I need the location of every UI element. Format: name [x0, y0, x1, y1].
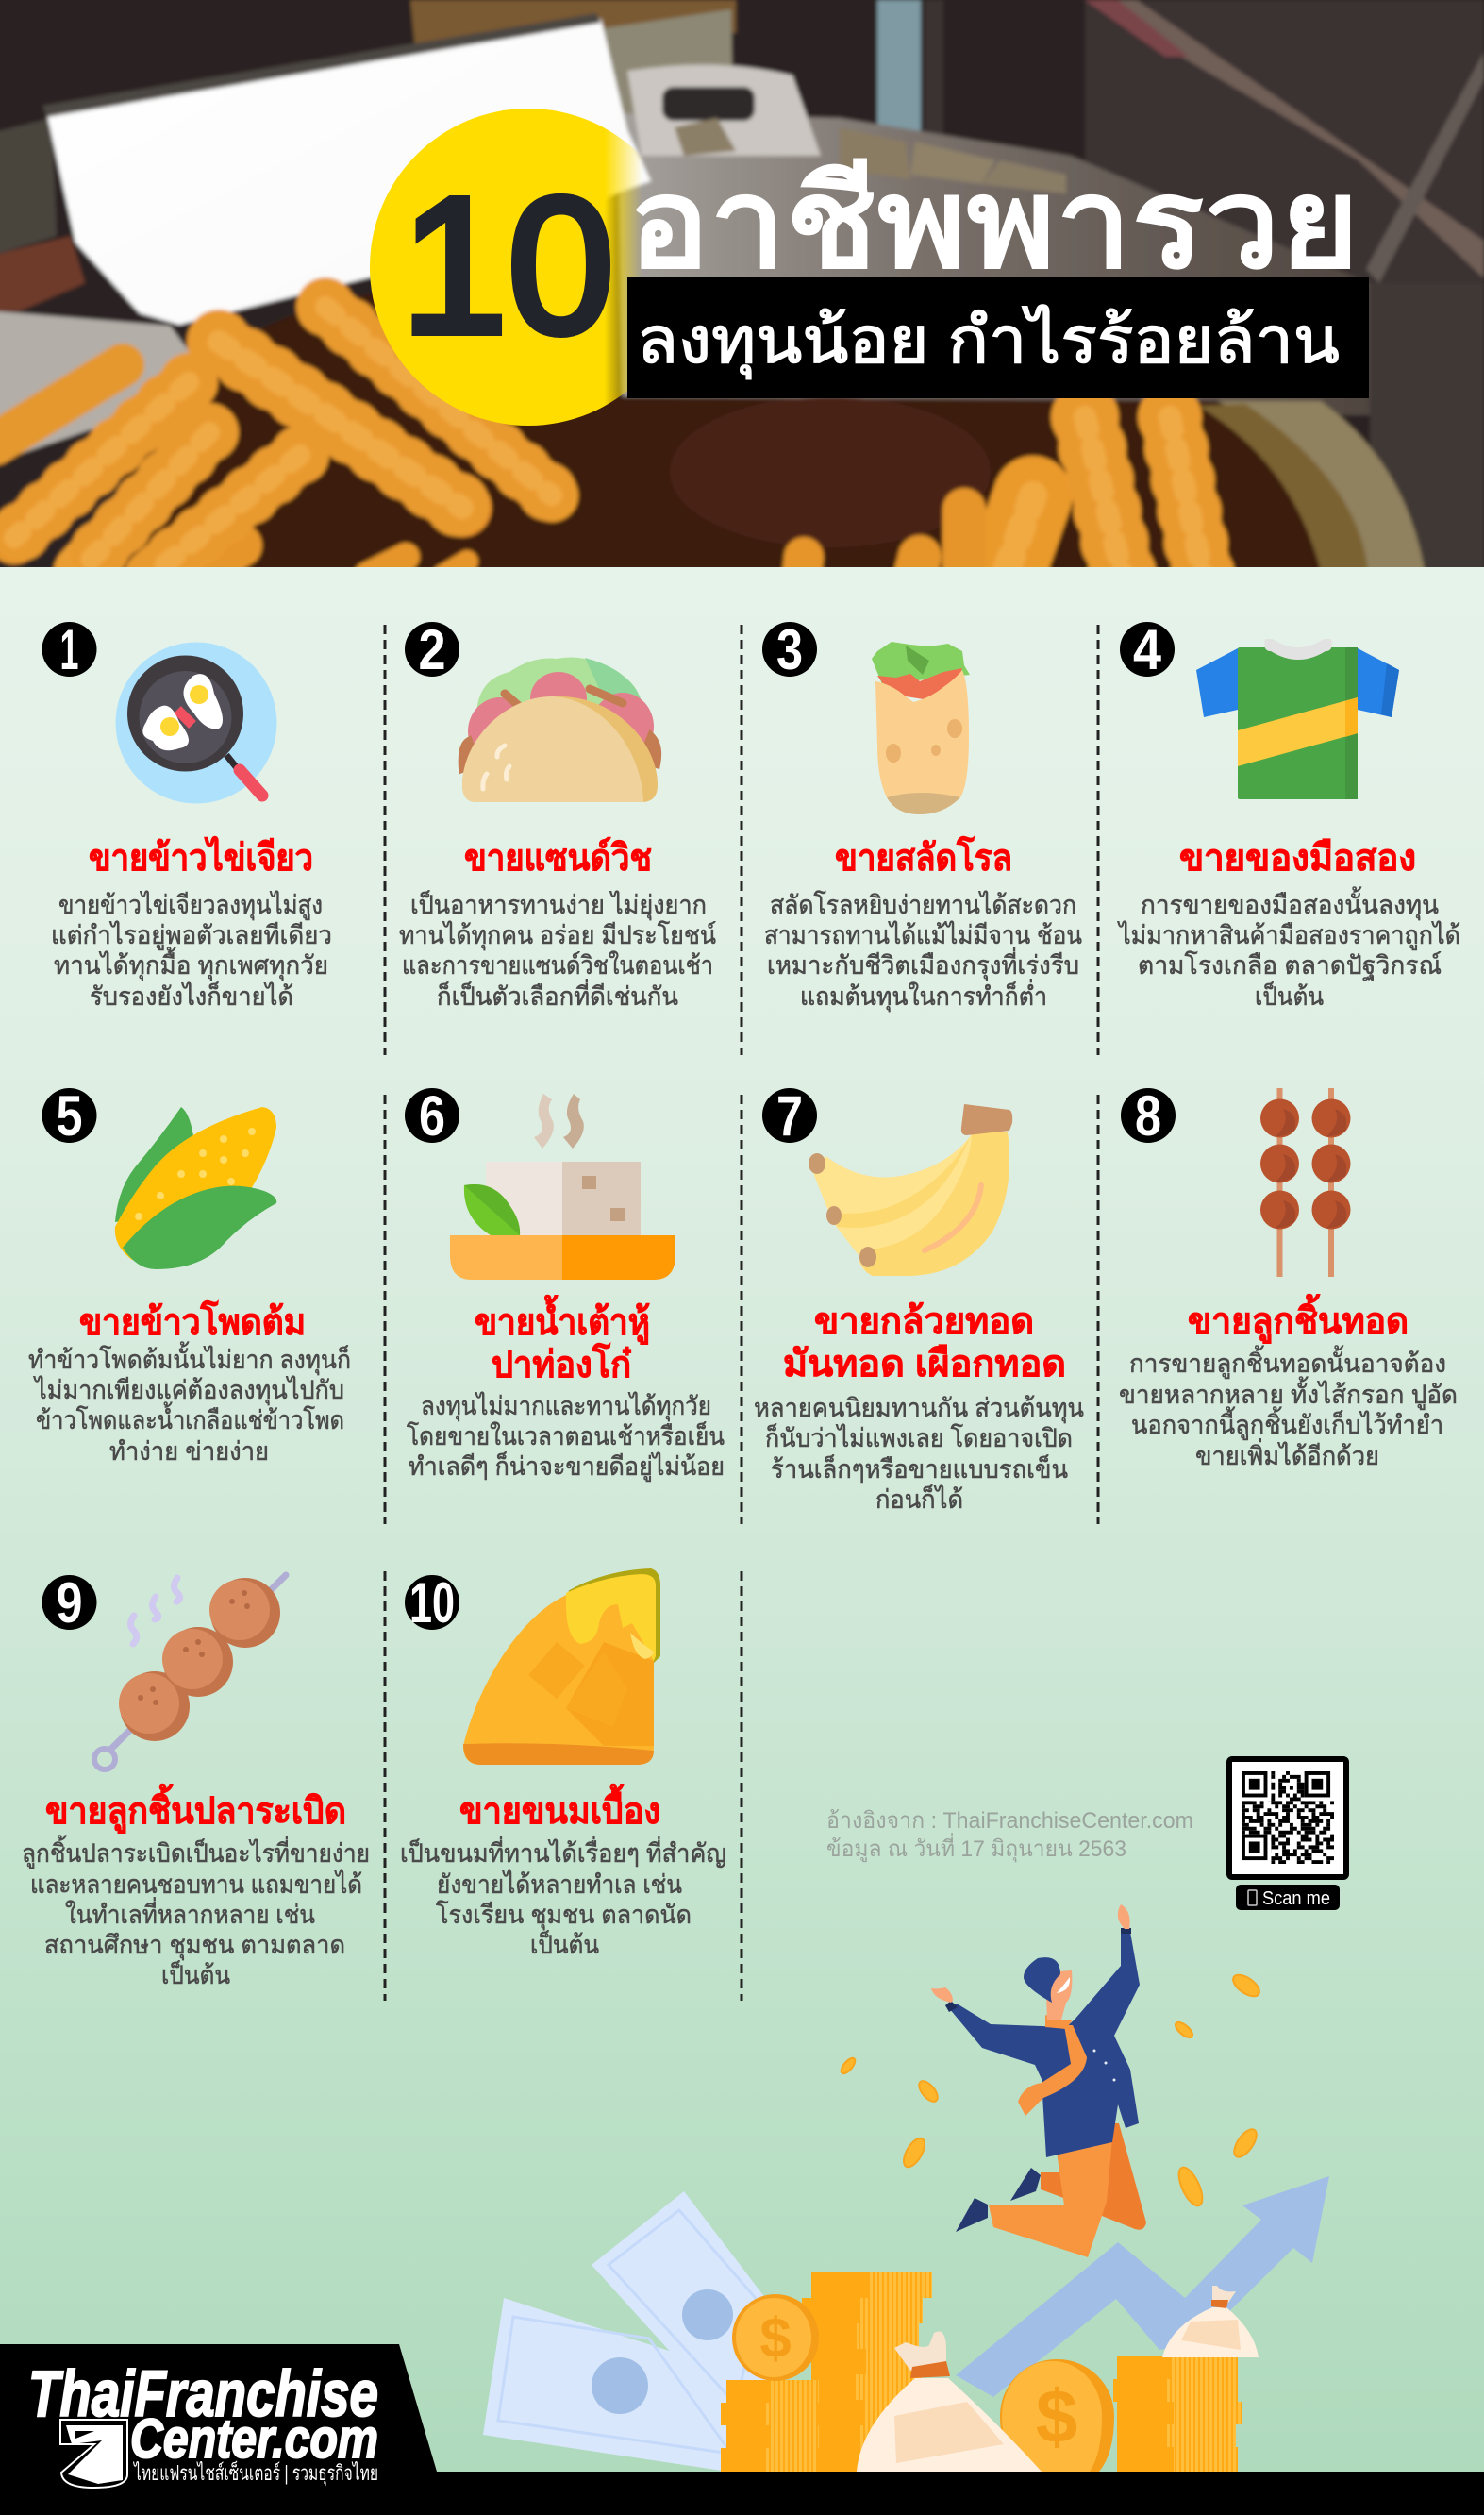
- description: ทานได้ทุกมื้อ ทุกเพศทุกวัย: [54, 947, 328, 981]
- card 4: second-hand goods: [1117, 618, 1460, 1011]
- description: การขายของมือสองนั้นลงทุน: [1141, 886, 1439, 921]
- number badge 6: [405, 1084, 459, 1148]
- logo text: ThaiFranchise: [28, 2357, 378, 2430]
- coins: $: [1036, 2374, 1077, 2458]
- description: ทำง่าย ข่ายง่าย: [109, 1437, 269, 1466]
- card 3: salad roll: [762, 618, 1082, 1013]
- description: ร้านเล็กๆหรือขายแบบรถเข็น: [771, 1452, 1068, 1484]
- description: [399, 888, 716, 1011]
- description: เป็นอาหารทานง่าย ไม่ยุ่งยาก: [410, 888, 707, 921]
- number badge 9: [42, 1571, 96, 1635]
- description: เป็นต้น: [161, 1958, 230, 1989]
- title block: [401, 154, 1369, 398]
- heading: ขายแซนด์วิช: [464, 836, 652, 879]
- description: ขายข้าวไข่เจียวลงทุนไม่สูง: [58, 891, 323, 921]
- scan me tag: Scan me: [1262, 1888, 1330, 1909]
- icon: taco sandwich: [462, 657, 658, 802]
- logo panel: ไทยแฟรนไชส์เซ็นเตอร์ | รวมธุรกิจไทย: [133, 2459, 378, 2486]
- description: ข้าวโพดและน้ำเกลือแช่ข้าวโพด: [36, 1401, 344, 1434]
- heading: ขายข้าวไข่เจียว: [89, 836, 313, 879]
- description: [754, 1394, 1084, 1514]
- bottom bar: [0, 2472, 1484, 2515]
- illustration: money stacks, arrow and bags: [483, 2176, 1329, 2472]
- description: เหมาะกับชีวิตเมืองกรุงที่เร่งรีบ: [767, 947, 1079, 981]
- number badge 2: [405, 618, 459, 681]
- description: ทานได้ทุกคน อร่อย มีประโยชน์: [399, 920, 716, 951]
- description: ในทำเลที่หลากหลาย เช่น: [65, 1897, 315, 1929]
- number badge 2: 2: [419, 618, 445, 681]
- icon: salad wrap: [872, 642, 970, 814]
- description: ก็เป็นตัวเลือกที่ดีเช่นกัน: [437, 979, 678, 1011]
- heading: ขายกล้วยทอด: [814, 1301, 1034, 1342]
- number badge 4: 4: [1133, 618, 1162, 681]
- card 10: Thai crepe: [400, 1568, 726, 1959]
- description: ทำเลดีๆ ก็น่าจะขายดีอยู่ไม่น้อย: [409, 1450, 725, 1482]
- coin stacks: [721, 2272, 1242, 2472]
- icon: tofu in bowl: [450, 1094, 675, 1280]
- description: และการขายแซนด์วิชในตอนเช้า: [402, 950, 713, 980]
- description: โดยขายในเวลาตอนเช้าหรือเย็น: [407, 1419, 725, 1450]
- card 2: sandwich: [399, 618, 716, 1011]
- description: สถานศึกษา ชุมชน ตามตลาด: [44, 1931, 345, 1961]
- donuts lumps: [14, 307, 1203, 576]
- falling coins: [839, 1970, 1263, 2209]
- number badge 4: [1120, 618, 1175, 681]
- card 8: fried meatballs: [1119, 1084, 1458, 1470]
- donuts highlight: [14, 307, 1203, 576]
- description: ก่อนก็ได้: [875, 1483, 963, 1514]
- number badge 8: [1121, 1084, 1176, 1148]
- money bags: [857, 2286, 1259, 2472]
- description: หลายคนนิยมทานกัน ส่วนต้นทุน: [754, 1394, 1084, 1424]
- illustration: jumping businessman: [931, 1904, 1146, 2257]
- heading: ขายน้ำเต้าหู้: [475, 1295, 650, 1345]
- icon: fish ball skewer: [94, 1575, 286, 1769]
- description: แถมต้นทุนในการทำก็ต่ำ: [800, 979, 1047, 1013]
- icon: meatball skewers: [1260, 1088, 1351, 1277]
- source note: [826, 1808, 1193, 1863]
- description: และหลายคนชอบทาน แถมขายได้: [30, 1870, 362, 1899]
- hero photo: fried dough in a pan: [0, 0, 1484, 576]
- description: [407, 1392, 725, 1482]
- number badge 3: [762, 618, 817, 681]
- coins: [732, 2294, 1114, 2472]
- number 10: 10: [401, 158, 614, 374]
- heading: ขายของมือสอง: [1179, 838, 1416, 879]
- description: [1117, 886, 1460, 1011]
- number badge 7: 7: [776, 1084, 803, 1148]
- icon: khanom buang: [463, 1568, 660, 1765]
- page background: [0, 567, 1484, 2515]
- subtitle box: ลงทุนน้อย กำไรร้อยล้าน: [637, 304, 1340, 379]
- description: เป็นต้น: [1255, 980, 1324, 1011]
- heading: ขายข้าวโพดต้ม: [79, 1300, 306, 1343]
- description: สามารถทานได้แม้ไม่มีจาน ช้อน: [764, 921, 1082, 949]
- icon: t-shirt: [1196, 639, 1399, 799]
- description: รับรองยังไงก็ขายได้: [90, 980, 293, 1011]
- scan me tag: [1236, 1885, 1340, 1910]
- card 7: fried banana: [754, 1084, 1084, 1514]
- description: เป็นต้น: [530, 1928, 599, 1959]
- card 5: boiled corn: [28, 1084, 351, 1466]
- description: [51, 891, 332, 1011]
- description: ก็นับว่าไม่แพงเลย โดยอาจเปิด: [765, 1421, 1073, 1452]
- number badge 10: 10: [409, 1571, 455, 1635]
- logo panel: Center.com: [130, 2408, 378, 2470]
- description: ไม่มากเพียงแค่ต้องลงทุนไปกับ: [33, 1376, 344, 1406]
- number badge 5: 5: [57, 1084, 83, 1148]
- coins: $: [759, 2306, 792, 2370]
- heading: [783, 1301, 1066, 1384]
- description: ยังขายได้หลายทำเล เช่น: [437, 1870, 682, 1899]
- description: [22, 1835, 370, 1989]
- QR code: [1226, 1756, 1349, 1880]
- description: [1119, 1345, 1458, 1470]
- description: สลัดโรลหยิบง่ายทานได้สะดวก: [770, 891, 1076, 919]
- description: แต่กำไรอยู่พอตัวเลยทีเดียว: [51, 921, 332, 950]
- description: [400, 1836, 726, 1959]
- description: เป็นขนมที่ทานได้เรื่อยๆ ที่สำคัญ: [400, 1836, 726, 1868]
- heading: ปาท่องโก๋: [492, 1343, 631, 1385]
- main title: อาชีพพารวย: [628, 154, 1359, 294]
- column dividers: [385, 625, 1098, 2001]
- number badge 9: 9: [57, 1571, 83, 1635]
- icon: frying pan with eggs: [115, 642, 277, 804]
- source note: ข้อมูล ณ วันที่ 17 มิถุนายน 2563: [826, 1833, 1126, 1863]
- heading: [475, 1295, 650, 1385]
- heading: มันทอด เผือกทอด: [783, 1344, 1066, 1384]
- description: โรงเรียน ชุมชน ตลาดนัด: [436, 1901, 692, 1931]
- description: [764, 891, 1082, 1013]
- number badge 6: 6: [419, 1084, 445, 1148]
- number badge 1: 1: [60, 618, 79, 681]
- card 9: exploding fish balls: [22, 1571, 370, 1989]
- icon: bananas: [809, 1104, 1012, 1276]
- number badge 7: [762, 1084, 817, 1148]
- logo panel: [0, 2344, 437, 2515]
- number badge 1: [42, 618, 96, 681]
- heading: ขายขนมเบื้อง: [459, 1784, 660, 1832]
- description: ตามโรงเกลือ ตลาดปัฐวิกรณ์: [1138, 950, 1442, 981]
- heading: ขายสลัดโรล: [835, 836, 1012, 879]
- number badge 5: [42, 1084, 96, 1148]
- source note: อ้างอิงจาก : ThaiFranchiseCenter.com: [826, 1808, 1193, 1834]
- description: การขายลูกชิ้นทอดนั้นอาจต้อง: [1129, 1345, 1446, 1379]
- arrow: [956, 2176, 1329, 2397]
- number badge 3: 3: [776, 618, 803, 681]
- logo arrow: [60, 2420, 127, 2488]
- heading: ขายลูกชิ้นทอด: [1188, 1294, 1409, 1344]
- description: ลูกชิ้นปลาระเบิดเป็นอะไรที่ขายง่าย: [22, 1835, 370, 1869]
- card 6: soy milk and dough sticks: [405, 1084, 725, 1482]
- description: ขายหลากหลาย ทั้งไส้กรอก ปูอัด: [1119, 1376, 1458, 1410]
- subtitle box: [627, 277, 1369, 398]
- bank notes: [483, 2191, 783, 2472]
- yellow circle: [370, 109, 687, 426]
- description: ลงทุนไม่มากและทานได้ทุกวัย: [421, 1392, 711, 1422]
- description: [28, 1341, 351, 1466]
- description: ขายเพิ่มได้อีกด้วย: [1195, 1438, 1379, 1470]
- number badge 8: 8: [1135, 1084, 1161, 1148]
- icon: corn: [115, 1107, 276, 1269]
- description: ทำข้าวโพดต้มนั้นไม่ยาก ลงทุนก็: [28, 1341, 351, 1376]
- description: นอกจากนี้ลูกชิ้นยังเก็บไว้ทำยำ: [1131, 1406, 1443, 1440]
- card 1: fried egg: [42, 618, 332, 1011]
- heading: ขายลูกชิ้นปลาระเบิด: [45, 1784, 346, 1834]
- description: ไม่มากหาสินค้ามือสองราคาถูกได้: [1117, 921, 1460, 950]
- donuts base: [0, 307, 1203, 576]
